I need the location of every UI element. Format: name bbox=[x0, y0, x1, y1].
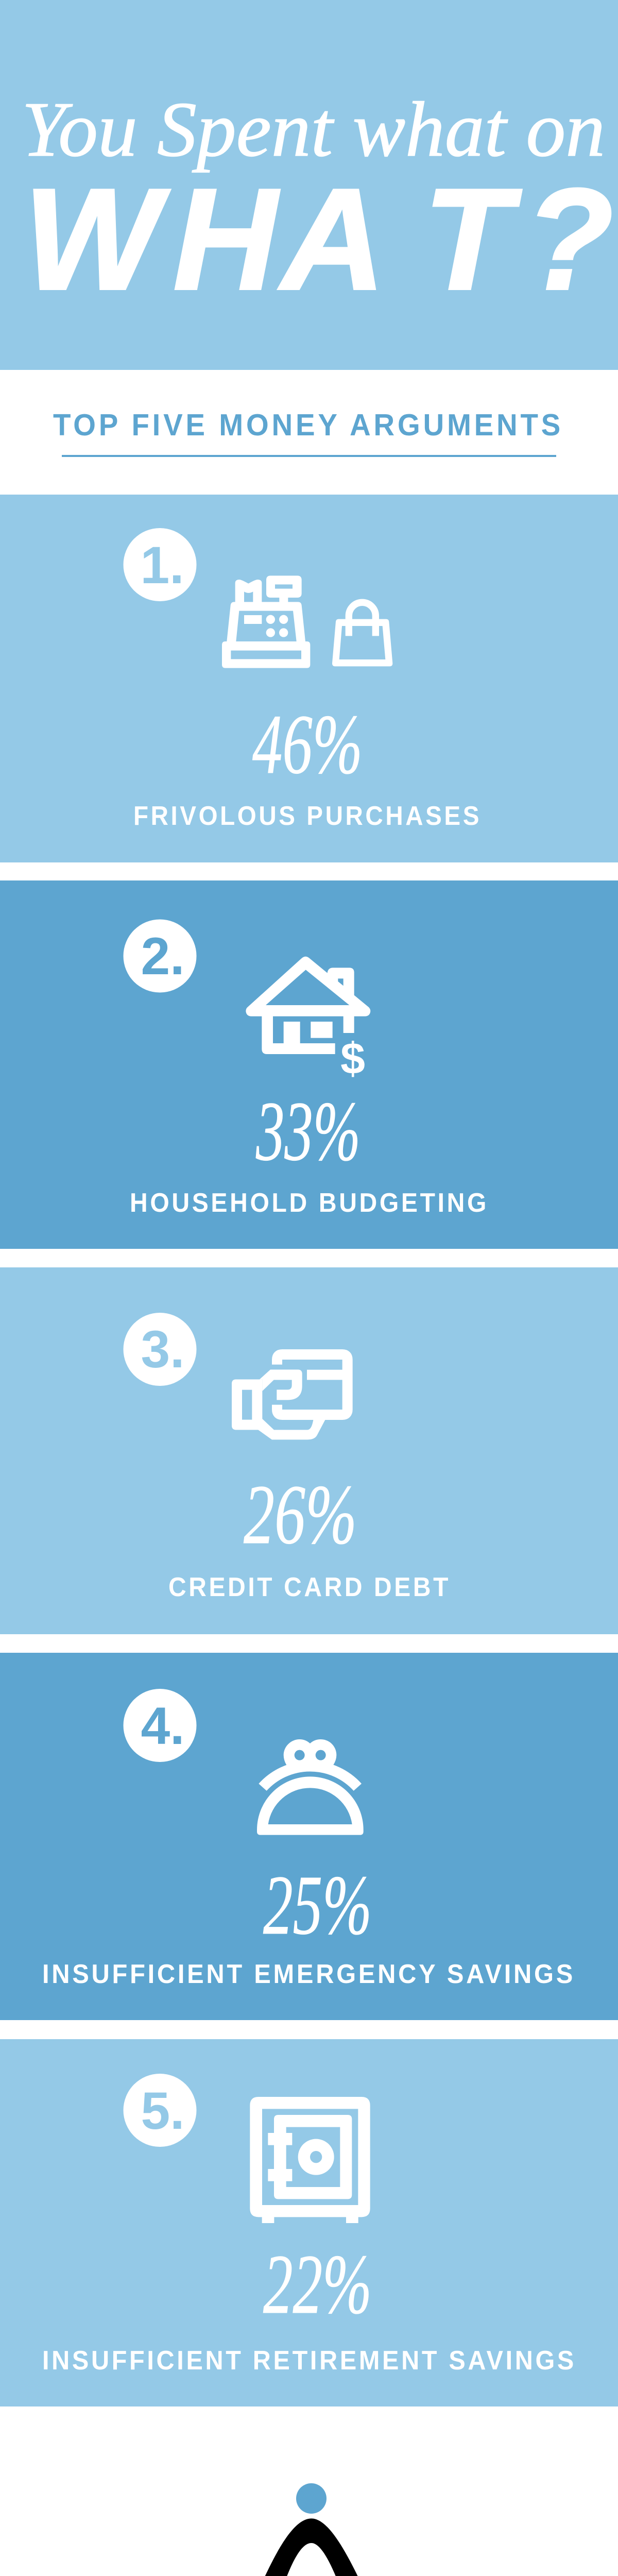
label: insufficient emergency savings: INSUFFICIENT EMERGENCY SAVINGS bbox=[42, 1959, 575, 1989]
panel: 3 credit card debt bbox=[0, 1267, 618, 1634]
stat: 26%: 26% bbox=[244, 1467, 357, 1562]
title: large WHAT?: WHAT? bbox=[24, 159, 613, 320]
icon: safe bbox=[250, 2097, 370, 2223]
label: insufficient retirement savings: INSUFFICIENT RETIREMENT SAVINGS bbox=[42, 2346, 576, 2376]
icon: coin purse bbox=[257, 1739, 364, 1835]
panel: 5 insufficient retirement savings bbox=[0, 2039, 618, 2406]
badge: number 5 bbox=[124, 2074, 197, 2147]
icon: house with dollar bbox=[246, 957, 370, 1083]
stat: 46%: 46% bbox=[252, 697, 363, 791]
label: household budgeting: HOUSEHOLD BUDGETING bbox=[130, 1188, 489, 1218]
icon: shopping bag bbox=[332, 602, 392, 666]
stat: 22%: 22% bbox=[263, 2237, 372, 2331]
badge: number 4 bbox=[124, 1689, 197, 1762]
badge: number 5: 5. bbox=[141, 2081, 185, 2140]
badge: number 4: 4. bbox=[141, 1697, 185, 1755]
badge: number 3 bbox=[124, 1313, 197, 1386]
panel: 4 insufficient emergency savings bbox=[0, 1653, 618, 2020]
badge: number 1: 1. bbox=[140, 536, 184, 595]
badge: number 3: 3. bbox=[141, 1320, 185, 1379]
panel: 2 household budgeting bbox=[0, 880, 618, 1249]
badge: number 2: 2. bbox=[141, 927, 185, 986]
heading: top five money arguments bbox=[53, 408, 563, 457]
icon: house with dollar: $ bbox=[340, 1034, 365, 1083]
panel: 1 frivolous purchases bbox=[0, 495, 618, 862]
stat: 33%: 33% bbox=[255, 1084, 360, 1178]
badge: number 2 bbox=[124, 919, 197, 992]
panel: hero title bbox=[0, 0, 618, 370]
heading: top five money arguments: TOP FIVE MONEY ARGUMENTS bbox=[53, 408, 563, 442]
logo: brightpeak bbox=[157, 2483, 464, 2576]
icon: peak figure bbox=[258, 2483, 365, 2576]
icon: cash register bbox=[222, 575, 310, 668]
label: credit card debt: CREDIT CARD DEBT bbox=[168, 1572, 451, 1602]
badge: number 1 bbox=[124, 528, 197, 601]
title: script line: You Spent what on bbox=[22, 86, 605, 173]
icon: hand holding card bbox=[232, 1354, 348, 1439]
label: frivolous purchases: FRIVOLOUS PURCHASES bbox=[133, 801, 482, 831]
stat: 25%: 25% bbox=[263, 1858, 372, 1952]
